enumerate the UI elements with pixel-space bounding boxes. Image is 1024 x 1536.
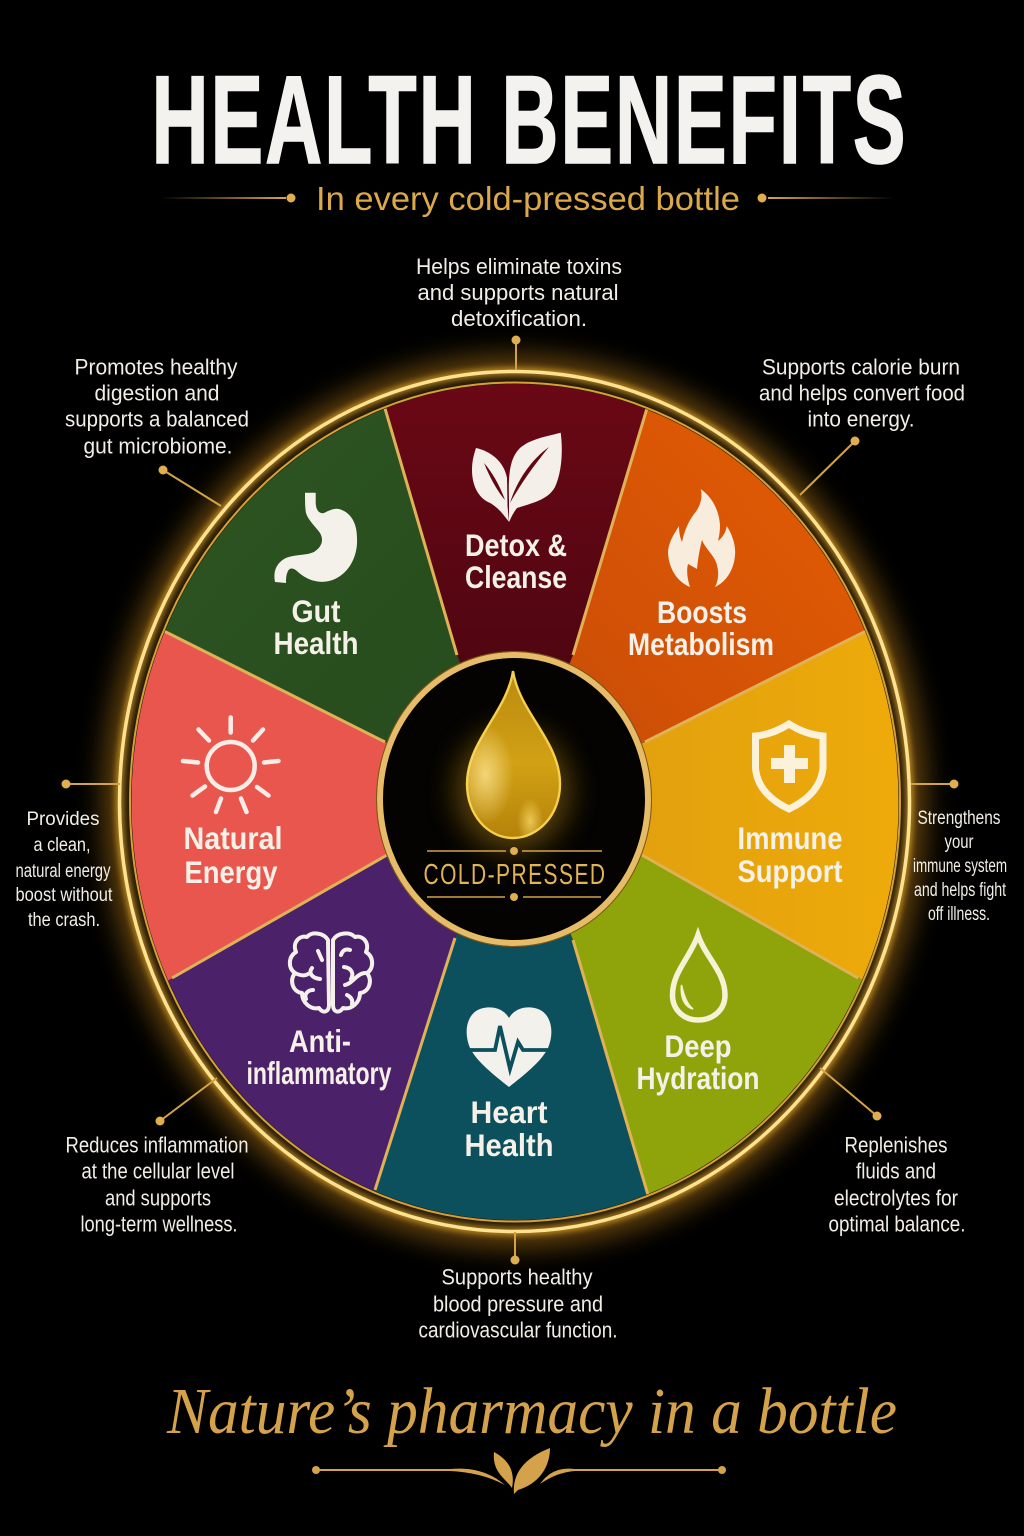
description: energy: a clean, bbox=[34, 835, 90, 856]
description: anti-inflammatory: at the cellular level bbox=[82, 1158, 234, 1184]
segment labels: Energy bbox=[184, 854, 278, 890]
description: energy: boost without bbox=[16, 885, 113, 906]
description: detox: detoxification. bbox=[451, 306, 587, 331]
segment labels: Anti- bbox=[289, 1023, 351, 1059]
segment labels: Metabolism bbox=[628, 626, 774, 662]
segment labels: Cleanse bbox=[465, 559, 567, 595]
description: gut: digestion and bbox=[94, 380, 220, 406]
icon: stomach bbox=[274, 493, 357, 583]
segment labels bbox=[184, 527, 843, 1163]
wheel ring glow bbox=[120, 372, 910, 1232]
label: cold-pressed: COLD-PRESSED bbox=[424, 859, 606, 891]
icon: flame bbox=[668, 489, 735, 587]
segment: hydration bbox=[570, 854, 862, 1194]
description: hydration: Replenishes bbox=[844, 1132, 948, 1158]
icon: leaves bbox=[472, 433, 562, 522]
segment labels: Detox & bbox=[465, 527, 567, 563]
description: energy bbox=[16, 809, 113, 931]
description: anti-inflammatory: long-term wellness. bbox=[80, 1212, 238, 1236]
segment: immune bbox=[640, 632, 898, 980]
icon: sun bbox=[183, 718, 278, 812]
description: immune: off illness. bbox=[928, 904, 990, 925]
icon: water drop bbox=[672, 935, 725, 1020]
subtitle with ornaments: In every cold-pressed bottle bbox=[316, 181, 740, 218]
dividers bbox=[162, 405, 868, 1195]
connector lines bbox=[62, 336, 958, 1264]
description: hydration bbox=[828, 1132, 966, 1236]
segment labels: Gut bbox=[292, 593, 341, 629]
description: gut: gut microbiome. bbox=[84, 434, 232, 458]
description: hydration: fluids and bbox=[856, 1158, 936, 1184]
segment labels: Support bbox=[738, 853, 843, 889]
segment labels: Natural bbox=[184, 820, 282, 856]
subtitle with ornaments bbox=[160, 181, 895, 218]
segment labels: Health bbox=[274, 625, 358, 661]
segment labels: Immune bbox=[738, 820, 842, 856]
icon: shield bbox=[756, 724, 823, 809]
description: metabolism bbox=[759, 354, 965, 432]
segment labels: Health bbox=[464, 1127, 554, 1163]
description: energy: Provides bbox=[26, 809, 100, 830]
description: heart: cardiovascular function. bbox=[418, 1318, 618, 1342]
segment: gut bbox=[165, 408, 460, 743]
segment labels: Deep bbox=[664, 1028, 732, 1064]
icon: oil drop bbox=[467, 671, 560, 838]
segment: metabolism bbox=[569, 410, 865, 744]
icon: brain bbox=[290, 933, 372, 1012]
description: energy: the crash. bbox=[28, 910, 100, 931]
description: gut bbox=[65, 354, 249, 458]
segment: heart bbox=[374, 933, 648, 1220]
description: metabolism: and helps convert food bbox=[759, 380, 965, 406]
description: immune: your bbox=[944, 832, 974, 853]
description: heart: blood pressure and bbox=[433, 1292, 603, 1316]
icon: heart bbox=[464, 1007, 554, 1087]
description: heart: Supports healthy bbox=[442, 1264, 592, 1290]
description: immune: Strengthens bbox=[918, 808, 1000, 829]
description: hydration: electrolytes for bbox=[834, 1186, 958, 1210]
segment labels: Hydration bbox=[636, 1060, 760, 1096]
description: metabolism: Supports calorie burn bbox=[762, 354, 960, 380]
description: metabolism: into energy. bbox=[808, 406, 914, 432]
segment labels: inflammatory bbox=[246, 1055, 392, 1091]
description: anti-inflammatory: Reduces inflammation bbox=[66, 1132, 248, 1158]
description: detox bbox=[416, 254, 622, 331]
description: detox: Helps eliminate toxins bbox=[416, 254, 622, 279]
description: hydration: optimal balance. bbox=[828, 1212, 966, 1236]
description: immune bbox=[913, 808, 1007, 925]
wheel segments bbox=[120, 366, 910, 1240]
description: gut: Promotes healthy bbox=[74, 354, 238, 380]
description: heart bbox=[418, 1264, 618, 1342]
description: anti-inflammatory: and supports bbox=[105, 1186, 211, 1210]
description: detox: and supports natural bbox=[418, 280, 618, 305]
footer ornament bbox=[312, 1448, 726, 1494]
segment: energy bbox=[132, 632, 388, 980]
center circle bbox=[376, 652, 652, 946]
tagline: Nature’s pharmacy in a bottle bbox=[166, 1375, 897, 1448]
segment labels: Heart bbox=[470, 1094, 548, 1130]
segment: detox bbox=[386, 384, 646, 664]
description: energy: natural energy bbox=[16, 861, 111, 882]
description: anti-inflammatory bbox=[66, 1132, 248, 1236]
segment labels: Boosts bbox=[657, 594, 747, 630]
segment: anti-inflammatory bbox=[168, 856, 458, 1191]
description: gut: supports a balanced bbox=[65, 406, 249, 432]
label: cold-pressed bbox=[424, 847, 606, 901]
